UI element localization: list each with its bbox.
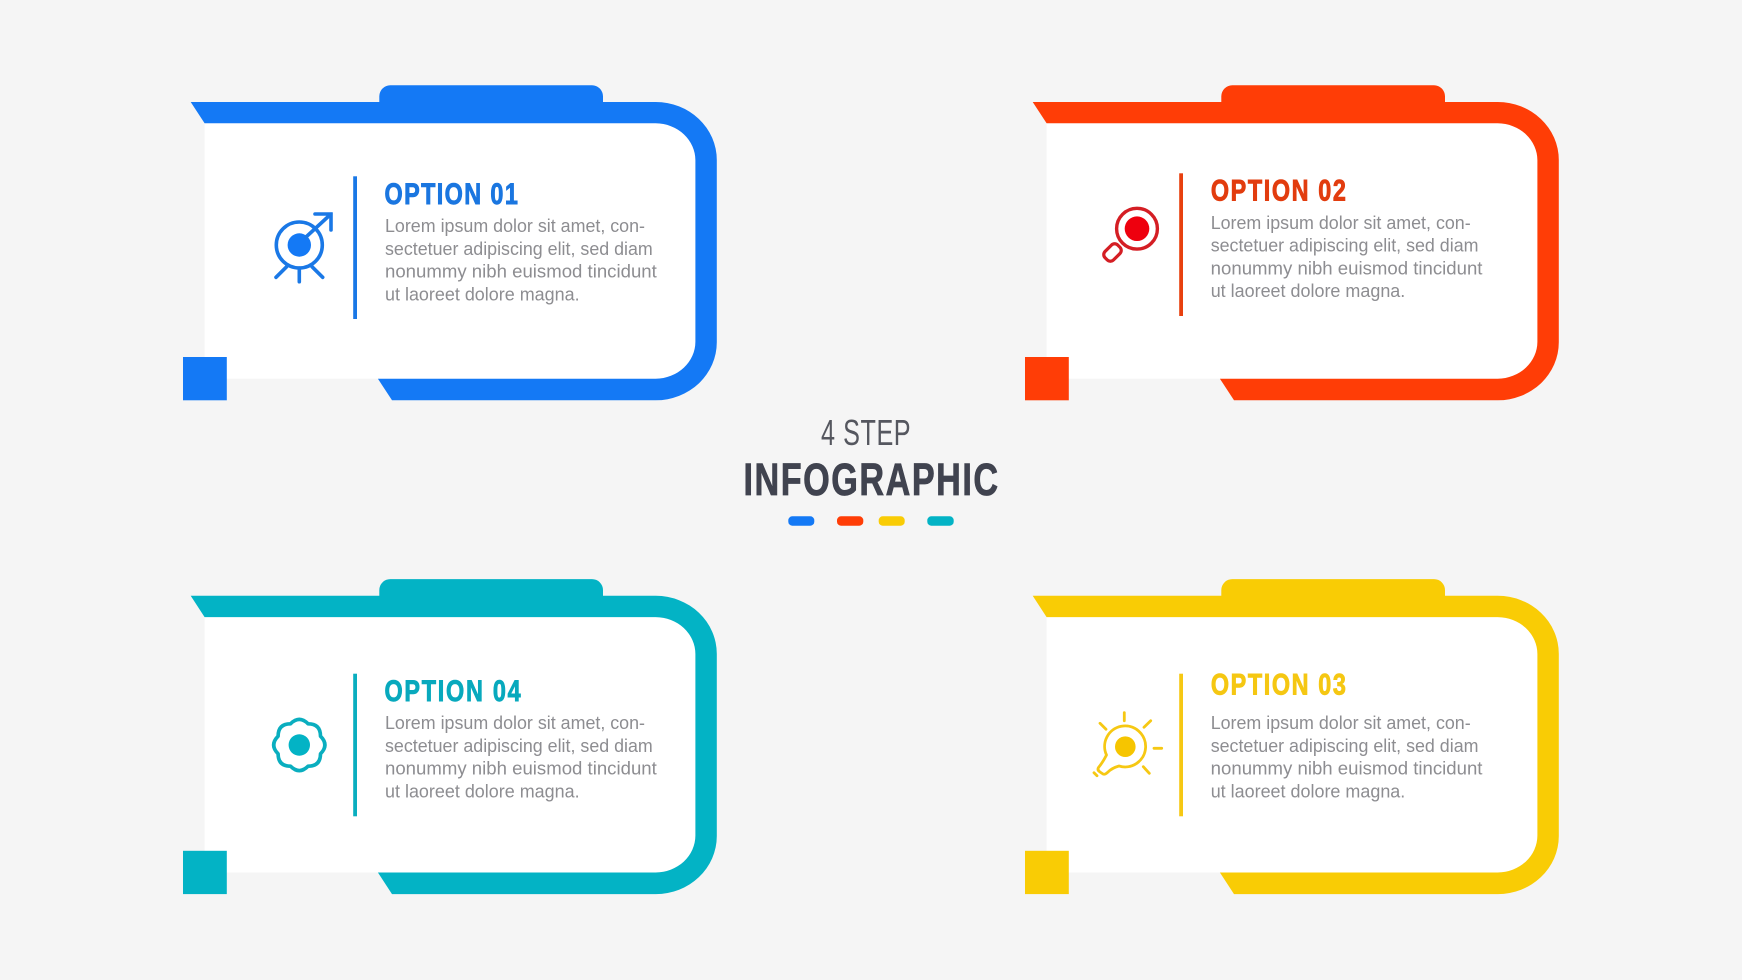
body text — [1211, 713, 1482, 801]
ribbon frame — [191, 85, 717, 400]
body text: ut laoreet dolore magna. — [385, 284, 580, 304]
body text: nonummy nibh euismod tincidunt — [1211, 759, 1482, 779]
ribbon frame — [1033, 579, 1559, 894]
corner square — [1025, 851, 1069, 894]
body text: ut laoreet dolore magna. — [1211, 281, 1405, 301]
body text: Lorem ipsum dolor sit amet, con- — [385, 713, 645, 733]
white card background — [1047, 123, 1537, 379]
divider line — [353, 176, 357, 319]
body text: ut laoreet dolore magna. — [1211, 781, 1405, 801]
heading: OPTION 03 — [1211, 668, 1346, 701]
center title block — [744, 413, 998, 526]
ribbon frame — [191, 579, 717, 894]
body text: ut laoreet dolore magna. — [385, 781, 580, 801]
divider line — [1179, 173, 1183, 316]
white card background — [205, 123, 695, 379]
icon: gear — [274, 719, 325, 771]
body text: nonummy nibh euismod tincidunt — [385, 759, 657, 779]
colour dots — [788, 516, 954, 526]
body text: Lorem ipsum dolor sit amet, con- — [1211, 713, 1471, 733]
divider line — [1179, 674, 1183, 816]
body text: sectetuer adipiscing elit, sed diam — [385, 736, 653, 756]
heading: OPTION 04 — [384, 674, 521, 708]
corner square — [1025, 357, 1069, 400]
body text: Lorem ipsum dolor sit amet, con- — [385, 216, 645, 236]
white card background — [205, 617, 695, 872]
body text: nonummy nibh euismod tincidunt — [1211, 258, 1482, 278]
body text — [385, 216, 657, 304]
divider line — [353, 674, 357, 816]
body text: nonummy nibh euismod tincidunt — [385, 262, 657, 282]
body text — [385, 713, 657, 801]
panel: option 04 — [183, 579, 717, 894]
heading: OPTION 02 — [1211, 174, 1346, 207]
body text: Lorem ipsum dolor sit amet, con- — [1211, 213, 1471, 233]
white card background — [1047, 617, 1537, 872]
body text: sectetuer adipiscing elit, sed diam — [1211, 236, 1478, 256]
panel: option 02 — [1025, 85, 1559, 400]
icon: magnifier — [1102, 208, 1157, 263]
panel: option 03 — [1025, 579, 1559, 894]
subtitle: 4 STEP — [821, 413, 911, 453]
body text: sectetuer adipiscing elit, sed diam — [385, 239, 653, 259]
icon: target with arrow — [276, 214, 331, 282]
heading: OPTION 01 — [384, 177, 518, 211]
icon: light bulb — [1094, 713, 1162, 776]
body text — [1211, 213, 1482, 301]
title: INFOGRAPHIC — [744, 456, 998, 505]
corner square — [183, 357, 227, 400]
corner square — [183, 851, 227, 894]
ribbon frame — [1033, 85, 1559, 400]
panel: option 01 — [183, 85, 717, 400]
body text: sectetuer adipiscing elit, sed diam — [1211, 736, 1478, 756]
